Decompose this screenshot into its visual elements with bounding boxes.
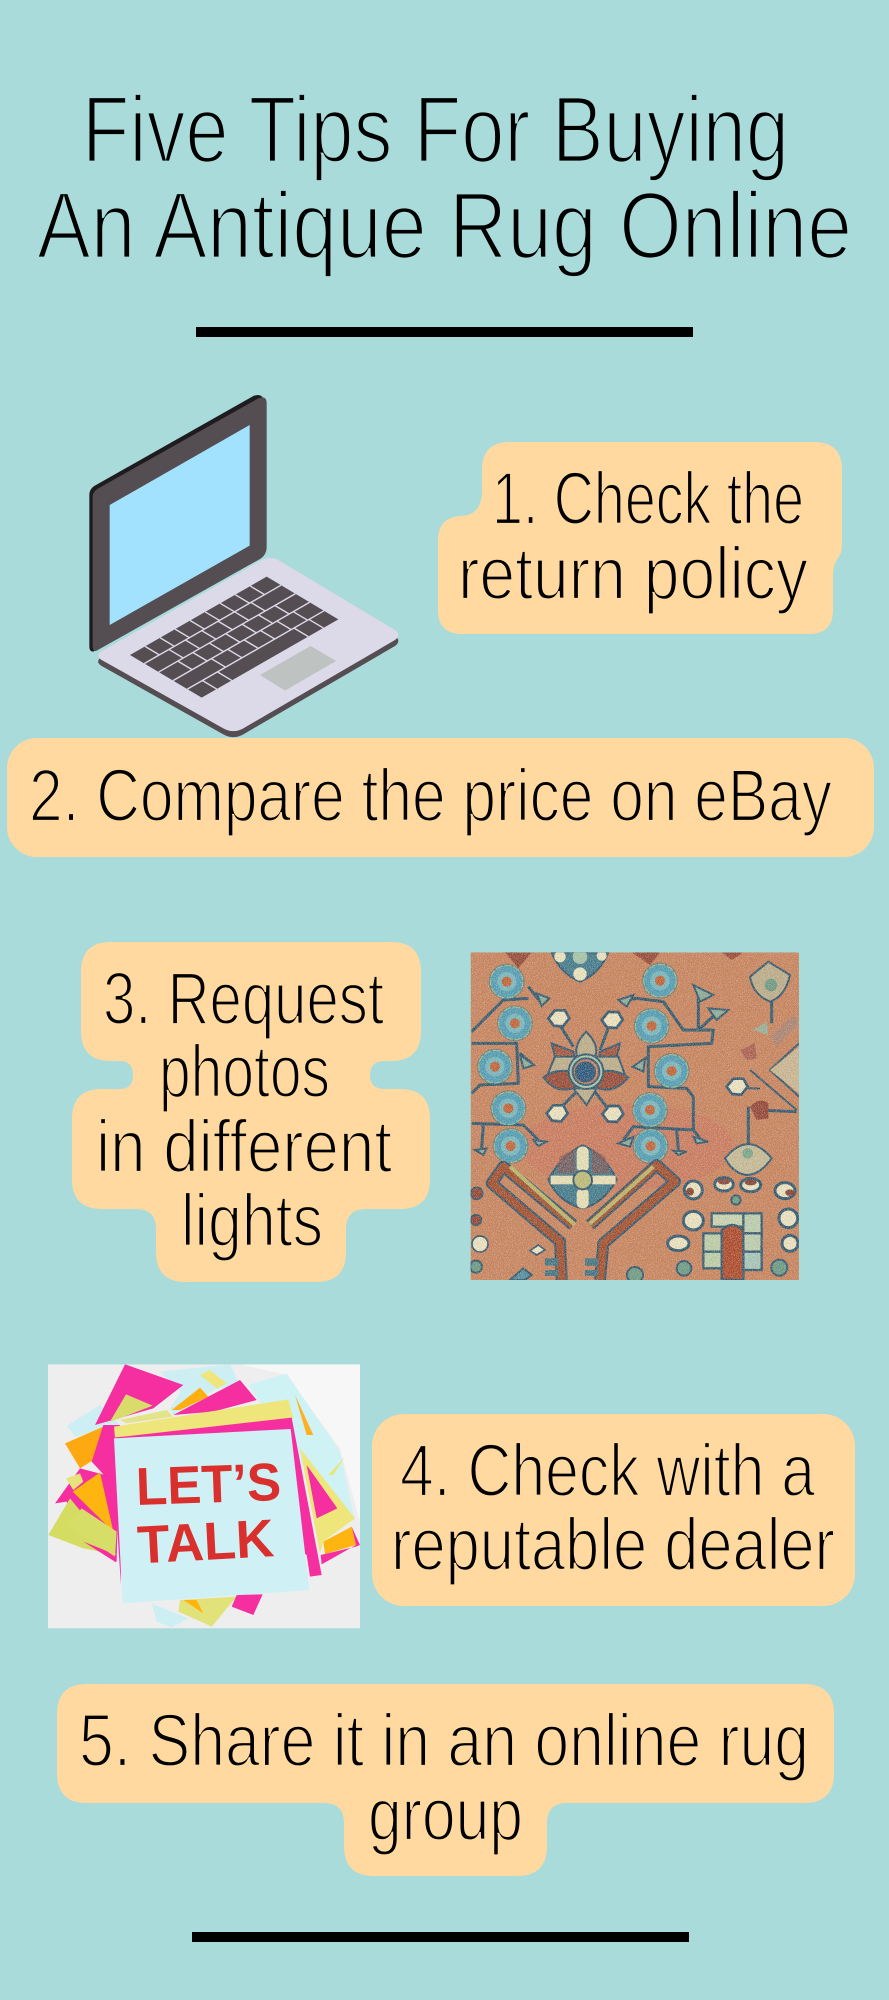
- icon: laptop: [89, 395, 398, 737]
- tip 5 callout: group: [368, 1773, 523, 1856]
- building motif: [703, 1213, 762, 1280]
- right tulips: [750, 962, 790, 1002]
- tip 1 callout: return policy: [458, 532, 808, 615]
- top flower: [552, 952, 608, 982]
- photo: sticky notes "Let's Talk": TALK: [136, 1509, 276, 1575]
- bottom divider rule: [192, 1932, 689, 1942]
- tip 2 callout: [7, 738, 874, 857]
- tip 5 callout: [57, 1684, 834, 1876]
- photo: sticky notes "Let's Talk": [48, 1364, 360, 1628]
- tip 3 callout: [72, 942, 430, 1282]
- chevrons: [492, 1165, 675, 1280]
- central flower: [543, 1032, 628, 1105]
- tip 1 callout: [438, 442, 842, 634]
- tip 4 callout: [372, 1414, 855, 1606]
- tip 3 callout: in different: [96, 1105, 392, 1188]
- title: [37, 77, 852, 279]
- photo: antique rug detail: [470, 949, 799, 1283]
- top divider rule: [196, 327, 693, 337]
- lower flower: [548, 1145, 617, 1208]
- tip 3 callout: 3. Request: [103, 957, 384, 1040]
- tip 3 callout: lights: [181, 1179, 323, 1262]
- photo: sticky notes "Let's Talk": LET’S: [135, 1453, 282, 1517]
- tip 3 callout: photos: [159, 1030, 330, 1113]
